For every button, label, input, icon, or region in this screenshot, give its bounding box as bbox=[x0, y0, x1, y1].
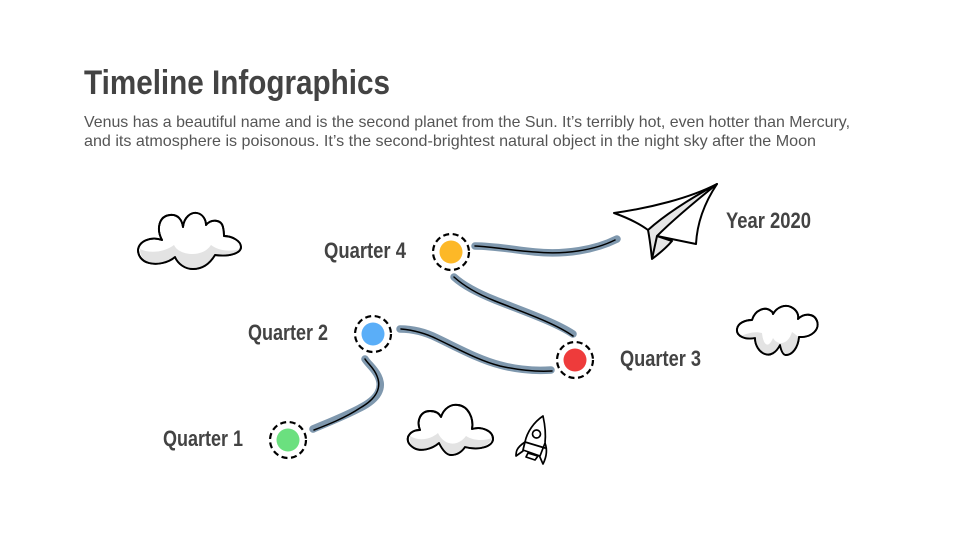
icon: cloud right bbox=[737, 306, 818, 355]
icon: rocket bbox=[516, 416, 546, 464]
marker: quarter 1 bbox=[270, 422, 306, 458]
marker: quarter 2 bbox=[355, 316, 391, 352]
label: quarter 1: Quarter 1 bbox=[163, 426, 243, 451]
description text: and its atmosphere is poisonous. It’s the second-brightest natural object in the night sky after the Moon bbox=[84, 133, 816, 150]
title: Timeline Infographics bbox=[84, 64, 390, 102]
label: quarter 2: Quarter 2 bbox=[248, 320, 328, 345]
marker: quarter 3 bbox=[557, 342, 593, 378]
description text: Venus has a beautiful name and is the second planet from the Sun. It’s terribly hot, even hotter than Mercury, bbox=[84, 114, 850, 131]
marker: quarter 4 bbox=[433, 234, 469, 270]
path: quarter 4 to plane bbox=[475, 239, 617, 253]
path: quarter 2 to quarter 3 bbox=[400, 329, 552, 371]
label: quarter 4: Quarter 4 bbox=[324, 238, 407, 263]
icon: cloud bottom bbox=[408, 405, 493, 455]
description text bbox=[84, 114, 850, 150]
icon: paper plane bbox=[614, 184, 717, 259]
path: quarter 3 to quarter 4 bbox=[454, 277, 573, 336]
label: quarter 3: Quarter 3 bbox=[620, 346, 701, 371]
label: year 2020: Year 2020 bbox=[726, 208, 811, 233]
path: quarter 1 to quarter 2 bbox=[313, 359, 380, 430]
icon: cloud top left bbox=[138, 213, 241, 269]
